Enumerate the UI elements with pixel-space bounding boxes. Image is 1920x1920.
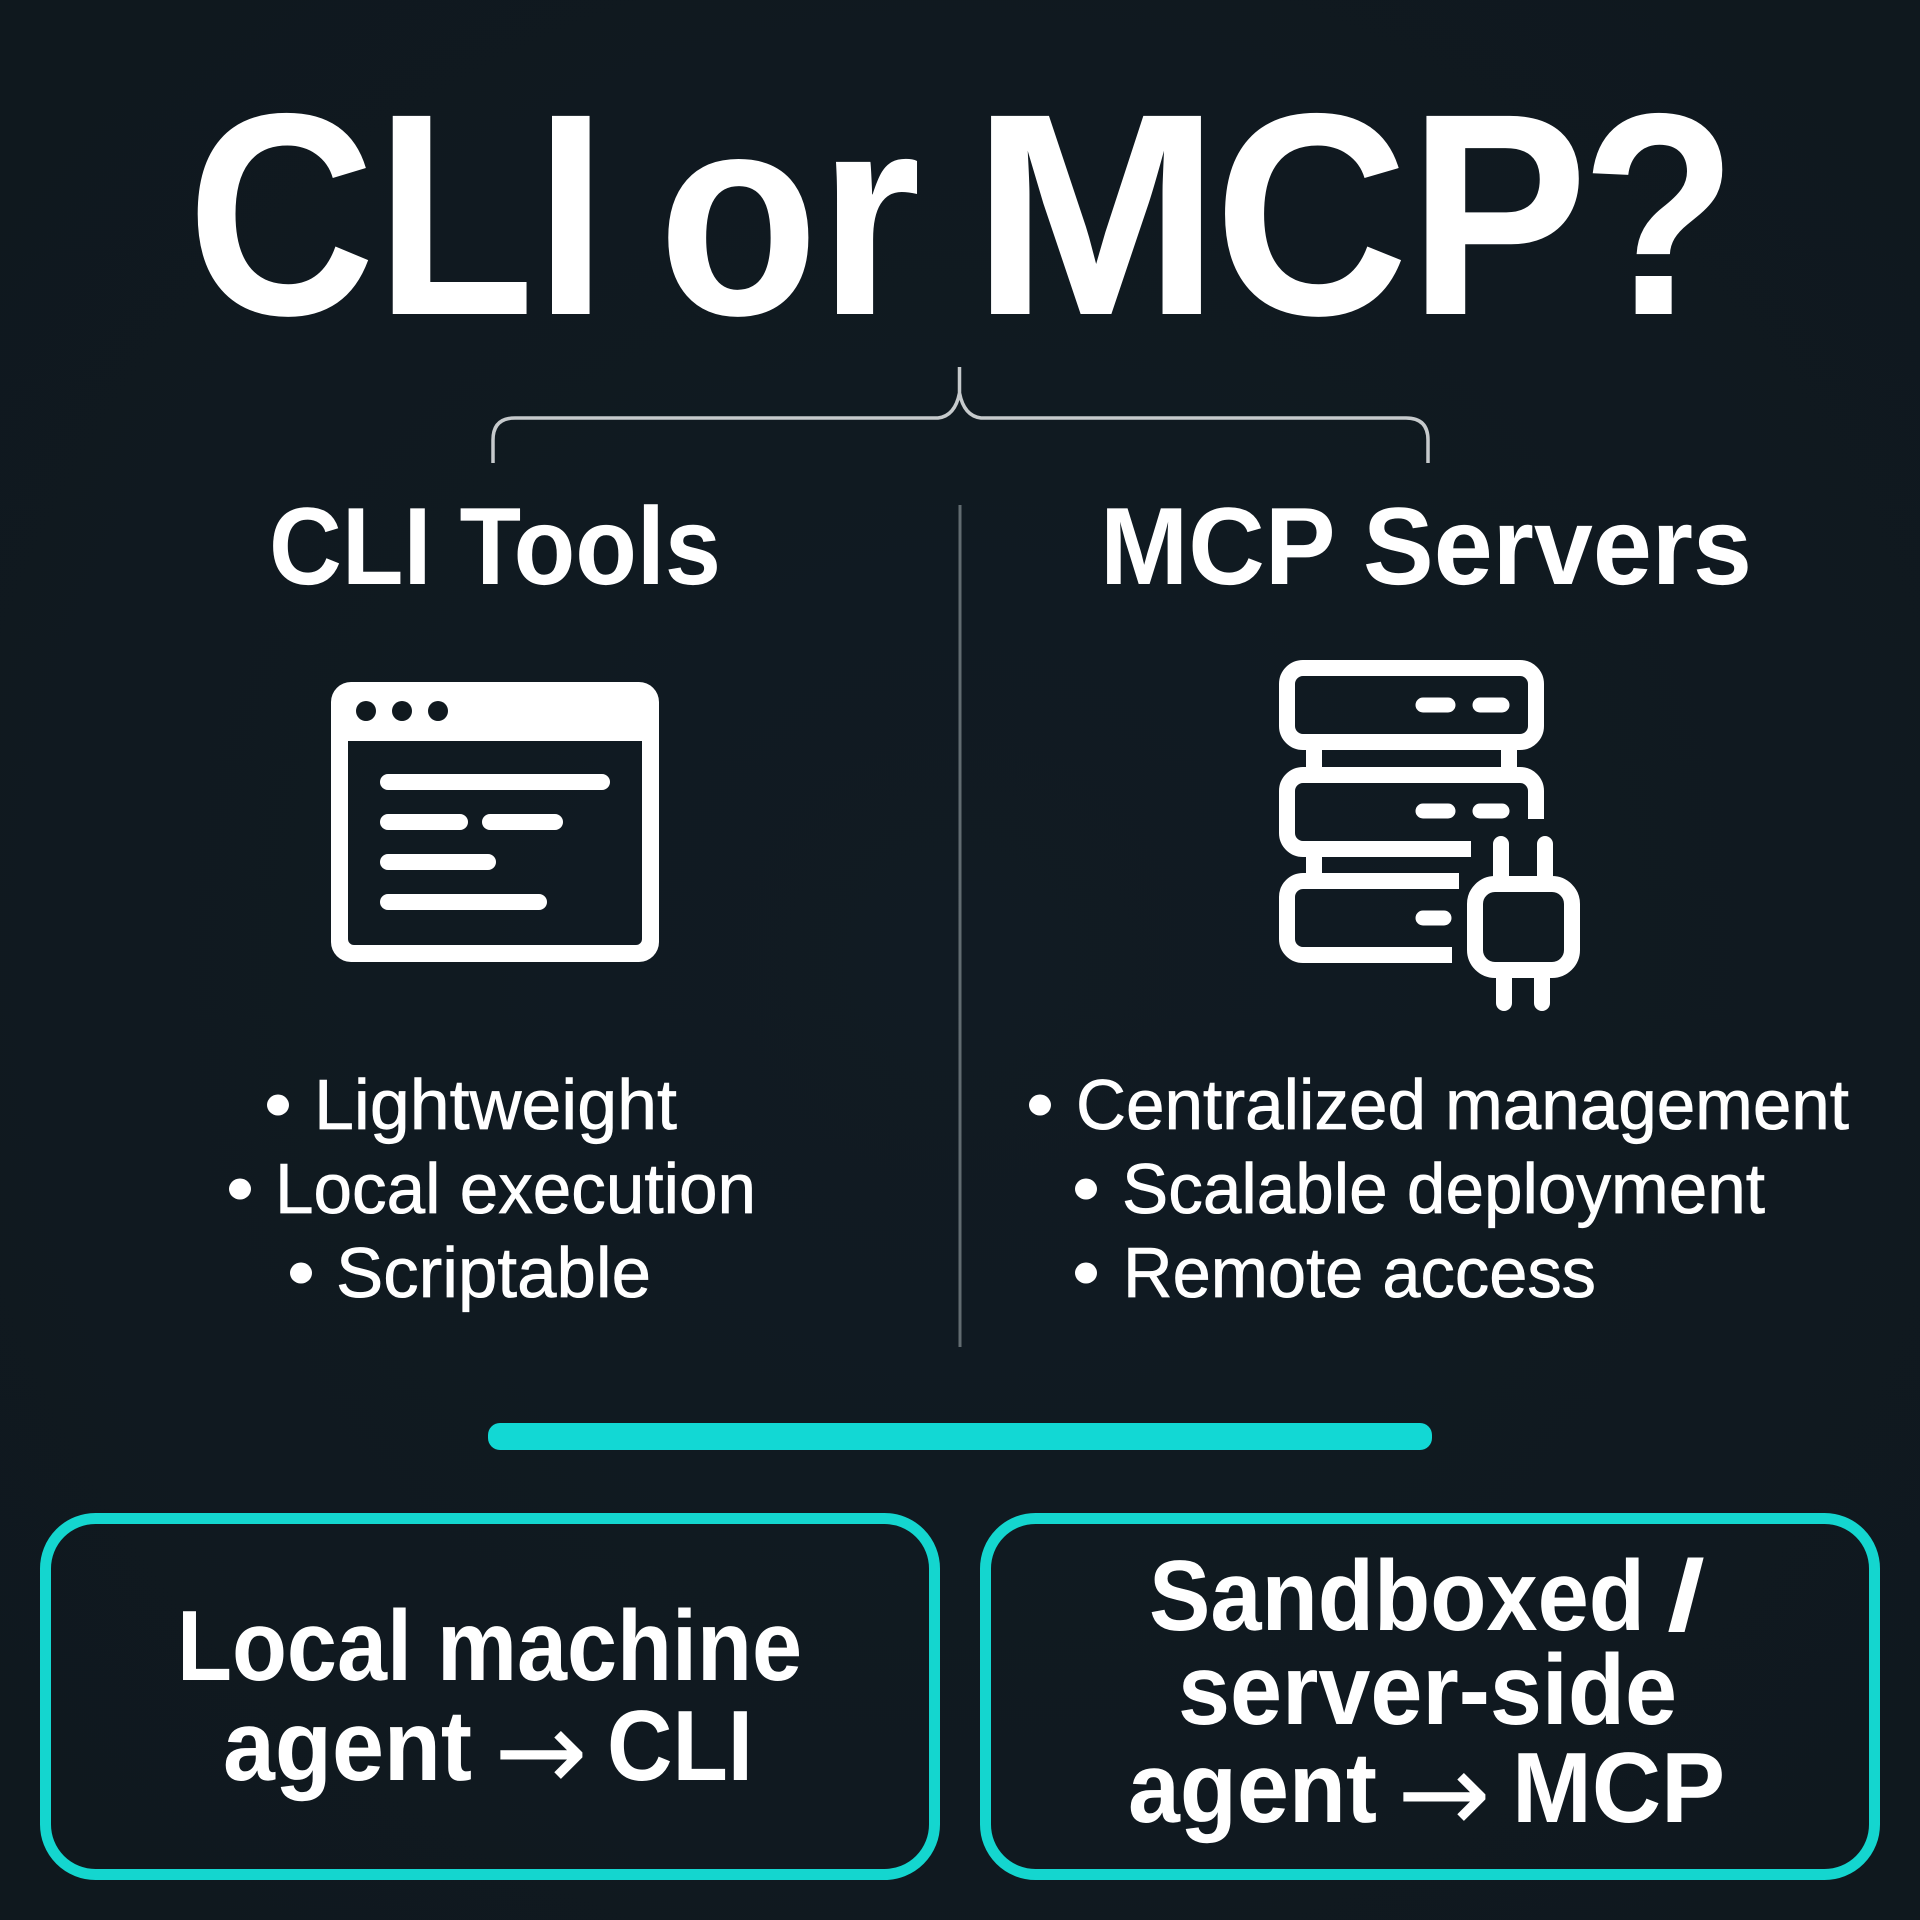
icon: terminal window <box>331 682 659 962</box>
heading: MCP Servers: MCP Servers <box>1100 485 1752 608</box>
title: M <box>971 54 1221 376</box>
title: or <box>658 54 921 376</box>
bullet list: MCP <box>1029 1066 1849 1313</box>
panel: sandboxed recommendation <box>986 1518 1874 1874</box>
icon: server stack with plug <box>1287 668 1572 1003</box>
teal accent bar <box>488 1423 1432 1450</box>
bullet list: MCP: Remote access <box>1123 1234 1596 1313</box>
bullet list: CLI <box>229 1066 756 1313</box>
bullet list: CLI: Lightweight <box>314 1066 677 1145</box>
bullet list: MCP: Scalable deployment <box>1122 1150 1765 1229</box>
bullet list: MCP: Centralized management <box>1076 1066 1849 1145</box>
panel: sandboxed recommendation: MCP <box>1512 1732 1725 1844</box>
bullet list: CLI: Local execution <box>275 1150 756 1229</box>
panel: sandboxed recommendation: server-side <box>1178 1634 1677 1746</box>
bracket connector <box>493 367 1428 463</box>
title <box>187 54 1737 376</box>
panel: local machine recommendation: Local machine <box>177 1590 802 1702</box>
panel: sandboxed recommendation: / <box>1667 1540 1705 1652</box>
panel: sandboxed recommendation: agent <box>1128 1732 1377 1844</box>
panel: sandboxed recommendation: → <box>1397 1729 1491 1859</box>
title: CLI <box>187 54 607 376</box>
panel: local machine recommendation: CLI <box>607 1690 753 1802</box>
heading: CLI Tools: CLI Tools <box>269 485 721 608</box>
panel: local machine recommendation <box>46 1518 934 1874</box>
column divider <box>958 505 962 1347</box>
title: CP <box>1214 54 1588 376</box>
panel: local machine recommendation: → <box>494 1687 588 1817</box>
bullet list: CLI: Scriptable <box>336 1234 651 1313</box>
panel: sandboxed recommendation: Sandboxed <box>1149 1540 1645 1652</box>
title: ? <box>1581 54 1737 376</box>
panel: local machine recommendation: agent <box>223 1690 472 1802</box>
